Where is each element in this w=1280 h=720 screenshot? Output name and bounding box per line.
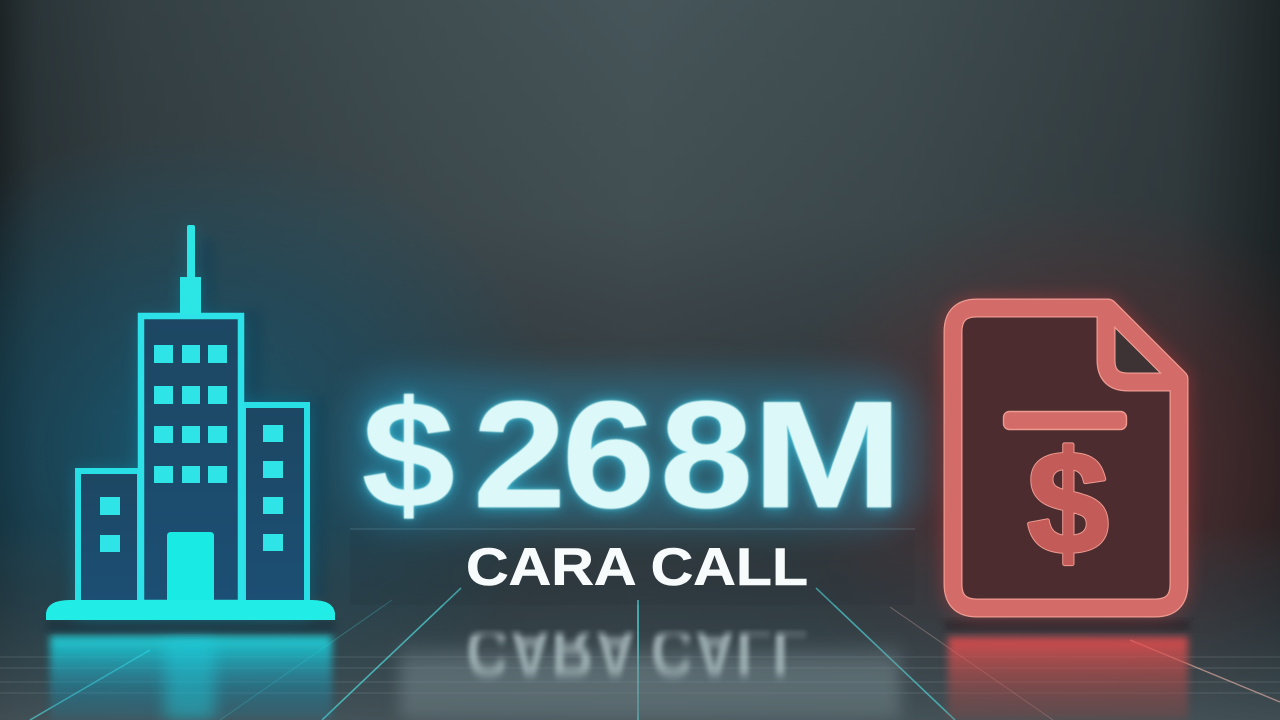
document glow: [953, 308, 1179, 608]
headline value: M: [752, 371, 903, 540]
dollar sign: $: [1027, 421, 1109, 584]
headline value: $268: [362, 369, 753, 539]
windows: side blocks: [100, 425, 283, 552]
floor reflection: light columns under label: [394, 644, 906, 720]
central tower: [141, 316, 241, 603]
icon: invoice document with dollar sign: [953, 308, 1179, 608]
folded corner: [1106, 312, 1178, 380]
door: [167, 532, 214, 602]
dollar sign: $: [1027, 421, 1109, 584]
headline value: [350, 369, 920, 540]
reflection: building glow: [44, 620, 338, 720]
subheading: CARA CALL: [466, 538, 808, 597]
subheading floor reflection: CARA CALL: [466, 609, 808, 692]
headline text: M: [752, 371, 903, 540]
building outer glow: [75, 225, 310, 620]
headline value: $268: [362, 369, 753, 539]
document sheet: [953, 308, 1179, 608]
headline glow: [350, 372, 920, 530]
floor grid lines: [0, 529, 1280, 720]
text line bar: [1004, 412, 1126, 430]
panel band behind label: [350, 530, 915, 605]
building ghost shadow: [200, 240, 325, 600]
icon: office buildings: [46, 225, 335, 620]
antenna: [180, 225, 201, 314]
right block: [243, 405, 307, 603]
headline value: M: [752, 371, 903, 540]
document outline: [953, 308, 1179, 608]
base slab: [46, 600, 335, 620]
reflection: document glow: [942, 619, 1194, 720]
windows: central tower: [154, 345, 227, 483]
headline text: $268: [362, 369, 753, 539]
left block: [78, 471, 140, 603]
